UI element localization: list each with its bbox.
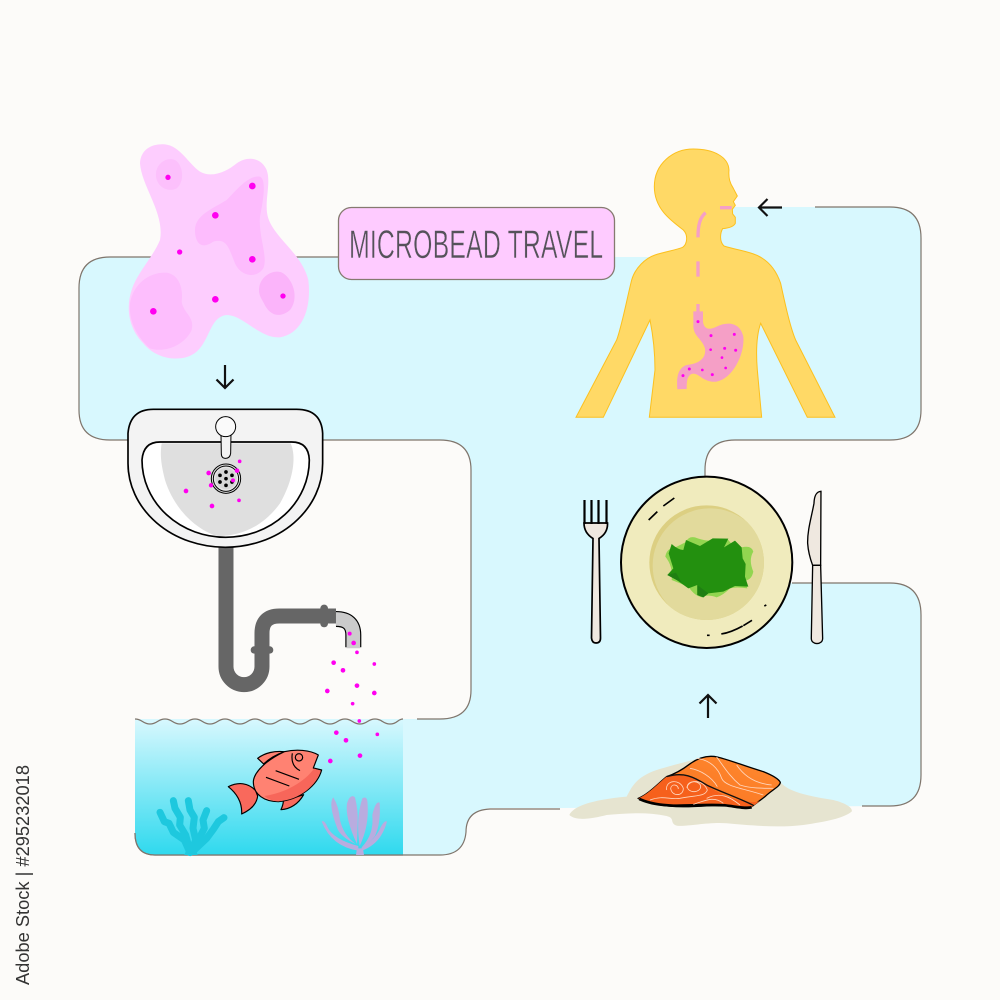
salmon shadow (569, 758, 852, 826)
plate (621, 477, 792, 648)
pipe (226, 543, 353, 685)
infographic canvas (16, 144, 922, 985)
microbead blob (129, 144, 309, 359)
human body (576, 149, 835, 417)
arrow: plate to mouth (759, 199, 782, 216)
water tank (135, 719, 403, 855)
coral: purple (322, 796, 387, 855)
flow path band (79, 207, 921, 855)
faucet (216, 417, 236, 458)
salad (665, 537, 753, 597)
knife (808, 491, 823, 644)
stomach (677, 311, 743, 389)
drain (211, 464, 241, 493)
arrow: salmon to plate (700, 695, 716, 718)
salmon (638, 756, 780, 808)
sink microbeads (184, 459, 356, 645)
stomach microbeads (681, 320, 737, 377)
title box (338, 208, 614, 280)
fish (228, 750, 322, 814)
sink (128, 409, 356, 645)
falling microbeads (325, 650, 379, 763)
stock image credit: Adobe Stock | #295232018 (13, 765, 33, 985)
fork (584, 500, 608, 643)
esophagus (698, 208, 732, 312)
arrow: blob to sink (216, 365, 234, 388)
title box: MICROBEAD TRAVEL (349, 223, 603, 268)
coral: teal (160, 801, 224, 855)
